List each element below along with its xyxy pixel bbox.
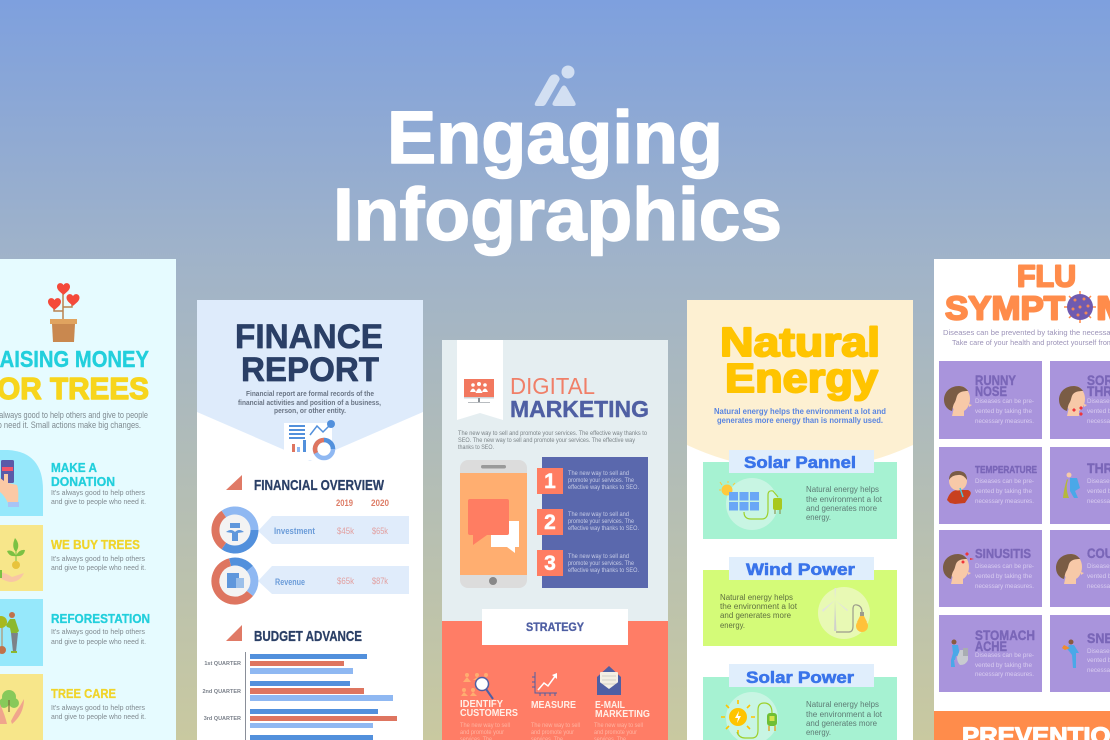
strategy columns: MEASURE	[531, 700, 576, 711]
block: we buy trees: and give to people who need it.	[51, 563, 146, 572]
heading: Energy	[725, 355, 878, 401]
heading	[0, 346, 149, 406]
intro text	[714, 406, 886, 425]
card: solar power: and generates more	[806, 719, 878, 728]
intro text: generates more energy than is normally used.	[717, 415, 883, 425]
strategy columns	[460, 699, 650, 740]
card: wind power: Wind Power	[746, 560, 855, 579]
intro text	[0, 410, 148, 431]
title: Engaging	[387, 96, 723, 179]
intro text: Diseases can be prevented by taking the necessary	[943, 328, 1110, 337]
row: investment: Investment	[274, 526, 315, 536]
bar chart: budget by quarter	[202, 652, 397, 740]
icon: throw up	[1063, 472, 1080, 498]
symptom titles: ACHE	[975, 638, 1007, 654]
year headers	[336, 498, 389, 508]
symptom descriptions: vented by taking the	[975, 488, 1032, 495]
icon: sinusitis	[943, 552, 974, 584]
intro text	[238, 389, 381, 415]
section heading: budget advance: BUDGET ADVANCE	[254, 628, 362, 645]
card: solar power: Solar Power	[746, 668, 854, 687]
strategy columns: The new way to sell	[460, 723, 510, 729]
icon: heart plant in pot	[48, 283, 80, 342]
year headers: 2019	[336, 498, 353, 508]
numbered steps	[537, 457, 648, 588]
heading	[235, 318, 383, 389]
symptom descriptions: necessary measures.	[975, 671, 1034, 678]
icon: runny nose	[944, 386, 972, 416]
strategy columns: IDENTIFY	[460, 699, 503, 710]
numbered steps: effective way thanks to SEO.	[568, 525, 639, 532]
heading: SYMPT	[945, 290, 1066, 328]
block: reforestation	[0, 599, 150, 666]
block: we buy trees: It's always good to help others	[51, 554, 145, 563]
numbered steps: promote your services. The	[568, 477, 634, 484]
icon: e-mail envelope	[597, 666, 621, 695]
block: make a donation: MAKE A	[51, 460, 98, 475]
heading: REPORT	[241, 351, 379, 389]
icon: smartphone with chat bubbles	[460, 460, 527, 588]
block: tree care	[0, 674, 146, 740]
symptom titles: SINUSITIS	[975, 546, 1031, 561]
block: tree care: and give to people who need it.	[51, 712, 146, 721]
symptom titles: STOMACH	[975, 627, 1035, 643]
prevention banner	[934, 711, 1110, 740]
numbered steps: promote your services. The	[568, 560, 634, 567]
block: make a donation: It's always good to help others	[51, 488, 145, 497]
heading: FINANCE	[235, 318, 383, 356]
strategy columns: The new way to sell	[531, 723, 580, 729]
numbered steps: effective way thanks to SEO.	[568, 484, 639, 491]
numbered steps: 2	[544, 511, 556, 534]
icon: sneeze	[1062, 640, 1079, 668]
block: make a donation: DONATION	[51, 474, 115, 489]
intro text: thanks to SEO.	[458, 444, 494, 451]
panel: raising money for trees	[0, 259, 176, 740]
icon: measure chart	[532, 672, 557, 696]
icon: identify customers	[461, 673, 493, 699]
heading: FLU	[1017, 258, 1076, 294]
panel: flu symptoms	[934, 258, 1110, 740]
intro text	[943, 328, 1110, 347]
numbered steps: 3	[544, 552, 556, 575]
numbered steps: promote your services. The	[568, 518, 634, 525]
row: investment: $65k	[372, 526, 388, 536]
card: wind power: the environment a lot	[720, 602, 798, 611]
strategy columns: The new way to sell	[594, 723, 643, 729]
heading: DIGITAL	[510, 373, 595, 399]
section heading: financial overview: FINANCIAL OVERVIEW	[254, 477, 385, 494]
card: solar pannel: the environment a lot	[806, 495, 883, 504]
block: tree care: It's always good to help others	[51, 703, 145, 712]
intro text: person, or other entity.	[274, 406, 346, 415]
card: wind power: and generates more	[720, 611, 792, 620]
card: wind power	[703, 557, 897, 646]
title: Infographics	[333, 173, 782, 256]
row: investment	[215, 510, 409, 550]
strategy banner	[482, 609, 628, 645]
icon: temperature	[947, 471, 971, 504]
row: investment: $45k	[337, 526, 354, 536]
block: tree care: TREE CARE	[51, 687, 116, 701]
heading	[510, 373, 649, 422]
bar chart: budget by quarter: 3rd QUARTER	[204, 716, 241, 722]
year headers: 2020	[371, 498, 389, 508]
block: we buy trees: WE BUY TREES	[51, 538, 140, 552]
symptom titles: TEMPERATURE	[975, 465, 1037, 476]
strategy columns: and promote your	[460, 730, 504, 736]
panel: digital marketing	[442, 340, 668, 740]
numbered steps: The new way to sell and	[568, 553, 629, 560]
card: solar pannel: Solar Pannel	[744, 453, 856, 472]
symptom titles: NOSE	[975, 383, 1007, 399]
symptom descriptions: vented by taking the	[975, 573, 1032, 580]
strategy banner: STRATEGY	[526, 622, 584, 634]
symptom descriptions: vented by taking the	[975, 662, 1032, 669]
ribbon with monitor icon	[457, 340, 503, 420]
card: solar power	[703, 664, 897, 740]
symptom descriptions: necessary measures.	[975, 498, 1034, 505]
card: solar pannel: energy.	[806, 513, 831, 522]
block: reforestation: and give to people who need it.	[51, 637, 146, 646]
block: make a donation	[0, 450, 146, 516]
heading: Natural	[720, 319, 880, 365]
block: reforestation: It's always good to help others	[51, 627, 145, 636]
strategy columns: E-MAIL	[595, 700, 625, 711]
strategy columns: and promote your	[594, 730, 637, 736]
intro text	[458, 430, 647, 451]
symptom descriptions: Diseases can be pre-	[975, 563, 1034, 570]
icon: stomach ache	[951, 640, 968, 667]
symptom descriptions: Diseases can be pre-	[975, 478, 1034, 485]
icon: sore throat	[1059, 386, 1087, 416]
section heading: budget advance	[226, 625, 362, 645]
row: revenue	[215, 562, 409, 601]
title	[333, 96, 782, 256]
intro text: Natural energy helps the environment a lot and	[714, 406, 886, 416]
icon: virus	[1064, 291, 1096, 323]
row: revenue: $65k	[337, 576, 354, 586]
symptom descriptions: necessary measures.	[975, 418, 1034, 425]
symptom descriptions: necessary measures.	[975, 583, 1034, 590]
card: solar power: the environment a lot	[806, 710, 883, 719]
symptom descriptions	[975, 398, 1110, 678]
row: revenue: Revenue	[275, 577, 305, 587]
panel: finance report	[197, 300, 423, 740]
logo icon	[535, 66, 576, 106]
numbered steps: 1	[544, 470, 556, 493]
icon: financial charts	[284, 420, 335, 460]
numbered steps: The new way to sell and	[568, 511, 629, 518]
row: revenue: $87k	[372, 576, 388, 586]
symptom titles: RUNNY	[975, 372, 1017, 388]
bar chart: budget by quarter: 2nd QUARTER	[202, 689, 241, 695]
card: solar pannel: Natural energy helps	[806, 485, 879, 494]
card: solar power: Natural energy helps	[806, 700, 879, 709]
section heading: financial overview	[226, 475, 385, 494]
heading: MARKETING	[510, 396, 649, 422]
numbered steps: effective way thanks to SEO.	[568, 567, 639, 574]
icon: cough	[1056, 554, 1084, 584]
card: wind power: energy.	[720, 621, 745, 630]
card: solar pannel	[703, 450, 897, 539]
intro text: The new way to sell and promote your services. The effective way thanks to	[458, 430, 647, 437]
bar chart: budget by quarter: 1st QUARTER	[204, 661, 241, 667]
symptom descriptions: vented by taking the	[975, 408, 1032, 415]
card: solar power: energy.	[806, 728, 831, 737]
strategy columns: MARKETING	[595, 709, 650, 720]
intro text: SEO. The new way to sell and promote your services. The effective way	[458, 437, 636, 444]
block: we buy trees	[0, 525, 146, 591]
card: wind power: Natural energy helps	[720, 593, 793, 602]
card: solar pannel: and generates more	[806, 504, 878, 513]
heading	[720, 319, 880, 401]
intro text: Financial report are formal records of the	[246, 389, 375, 398]
block: reforestation: REFORESTATION	[51, 612, 150, 626]
panel: natural energy	[687, 300, 913, 740]
intro text: financial activities and position of a business,	[238, 398, 381, 407]
symptom descriptions: Diseases can be pre-	[975, 398, 1034, 405]
strategy columns: and promote your	[531, 730, 574, 736]
block: make a donation: and give to people who need it.	[51, 497, 146, 506]
strategy columns: CUSTOMERS	[460, 708, 518, 719]
symptom descriptions: Diseases can be pre-	[975, 652, 1034, 659]
symptom titles	[975, 372, 1110, 654]
symptom cards	[939, 361, 1110, 692]
heading	[945, 258, 1110, 328]
numbered steps: The new way to sell and	[568, 470, 629, 477]
